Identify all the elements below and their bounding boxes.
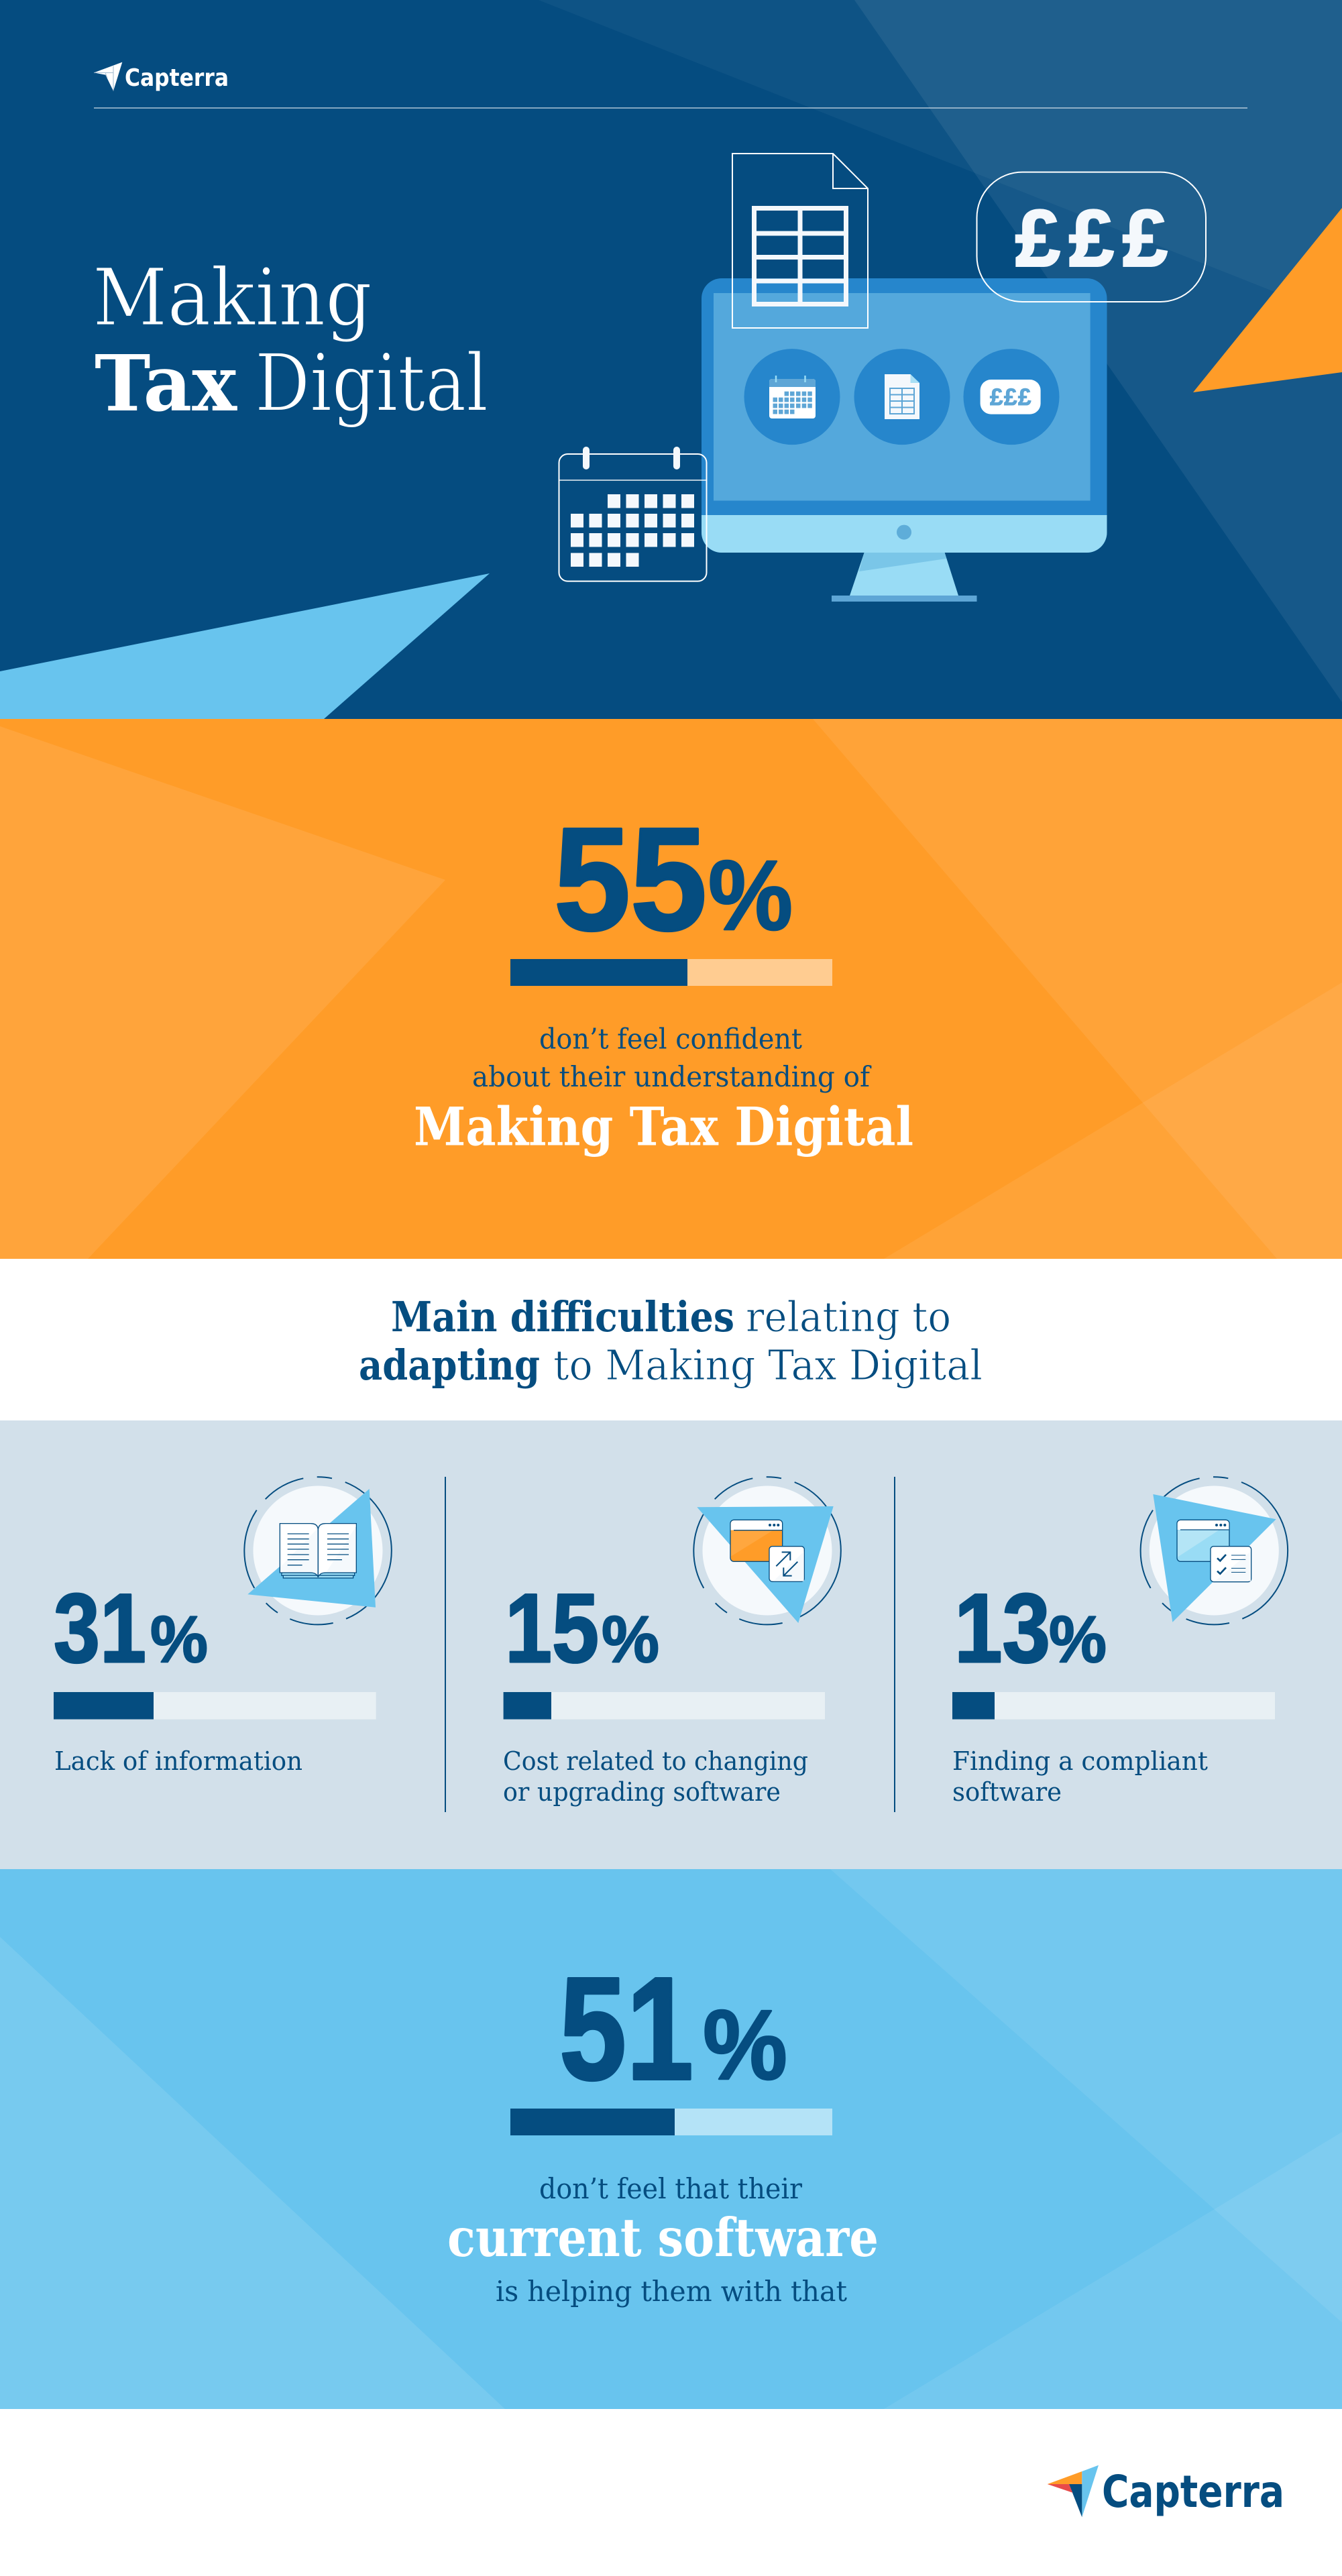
progress bar: 51%: [510, 2109, 832, 2135]
label: cost: or upgrading software: [503, 1777, 781, 1807]
illustration: pounds speech bubble: £: [1015, 193, 1060, 283]
panel: difficulties: [0, 1420, 1342, 1869]
logo: Capterra white: [94, 62, 229, 92]
label: compliant software: [952, 1746, 1208, 1807]
number: 13%: 13: [954, 1573, 1050, 1683]
icon: screen calendar: [744, 349, 840, 445]
number: 31%: 31: [54, 1573, 146, 1683]
progress bar: 15%: [504, 1692, 825, 1720]
decorative orange triangle: [1193, 208, 1342, 392]
text: current software: is helping them with that: [496, 2275, 847, 2308]
number: 15%: 15: [505, 1573, 599, 1683]
number: 55%: [554, 798, 793, 961]
icon: screen pounds: £: [1004, 384, 1017, 410]
label: cost: [503, 1746, 808, 1807]
illustration: desktop monitor: [702, 278, 1107, 602]
illustration: pounds speech bubble: £: [1069, 193, 1114, 283]
title: [93, 251, 488, 429]
number: 13%: %: [1049, 1602, 1107, 1676]
number: 51%: 51: [559, 1948, 693, 2111]
icon: screen pounds: [963, 349, 1060, 445]
column: compliant software: [952, 1477, 1288, 1807]
illustration: calendar outline: [559, 447, 707, 581]
number: 31%: %: [150, 1602, 208, 1676]
text: current software: [447, 2172, 879, 2308]
text: current software: don’t feel that their: [539, 2172, 803, 2205]
column: cost: [503, 1477, 841, 1807]
label: cost: Cost related to changing: [503, 1746, 808, 1776]
title: Tax: [95, 339, 237, 429]
label: compliant software: Finding a compliant: [952, 1746, 1208, 1776]
icon: window swap badge: [693, 1477, 841, 1624]
progress bar: 55%: [510, 959, 832, 986]
icon: book badge: [244, 1477, 392, 1624]
panel: hero header: [0, 0, 1342, 719]
title: Digital: [255, 337, 488, 429]
label: lack of information: Lack of information: [54, 1746, 302, 1776]
panel: 51% statistic: [0, 1869, 1342, 2409]
icon: checklist badge: [1141, 1477, 1288, 1624]
text: understanding: Making Tax Digital: [414, 1096, 913, 1158]
logo: Capterra white: Capterra: [125, 64, 229, 92]
text: understanding: [414, 1022, 913, 1158]
text: current software: current software: [447, 2206, 879, 2269]
panel: 55% statistic: [0, 719, 1342, 1259]
progress bar: 31%: [54, 1692, 376, 1720]
icon: screen document: [854, 349, 950, 445]
column: lack of information: [54, 1477, 392, 1776]
text: understanding: don’t feel confident: [539, 1022, 802, 1056]
heading: main difficulties: relating to: [746, 1292, 951, 1341]
decorative light blue triangle: [0, 573, 490, 719]
text: understanding: about their understanding of: [472, 1060, 872, 1093]
icon: screen pounds: £: [990, 384, 1003, 410]
progress bar: 13%: [952, 1692, 1275, 1720]
heading: main difficulties: adapting: [359, 1341, 540, 1390]
number: 55%: 55: [554, 798, 707, 961]
icon: screen pounds: £: [1018, 384, 1031, 410]
number: 51%: %: [703, 1990, 787, 2101]
label: compliant software: software: [952, 1777, 1062, 1807]
logo: Capterra colour: [1048, 2465, 1284, 2518]
heading: main difficulties: Main difficulties: [391, 1292, 734, 1341]
title: Making: [93, 251, 372, 343]
number: 55%: %: [708, 840, 793, 951]
heading: main difficulties: to Making Tax Digital: [553, 1341, 983, 1390]
illustration: spreadsheet document outline: [732, 154, 868, 328]
number: 15%: %: [602, 1602, 659, 1676]
illustration: pounds speech bubble: £: [1123, 193, 1168, 283]
heading: main difficulties: [359, 1292, 983, 1390]
logo: Capterra colour: Capterra: [1102, 2466, 1284, 2518]
illustration: pounds speech bubble: [976, 172, 1206, 302]
